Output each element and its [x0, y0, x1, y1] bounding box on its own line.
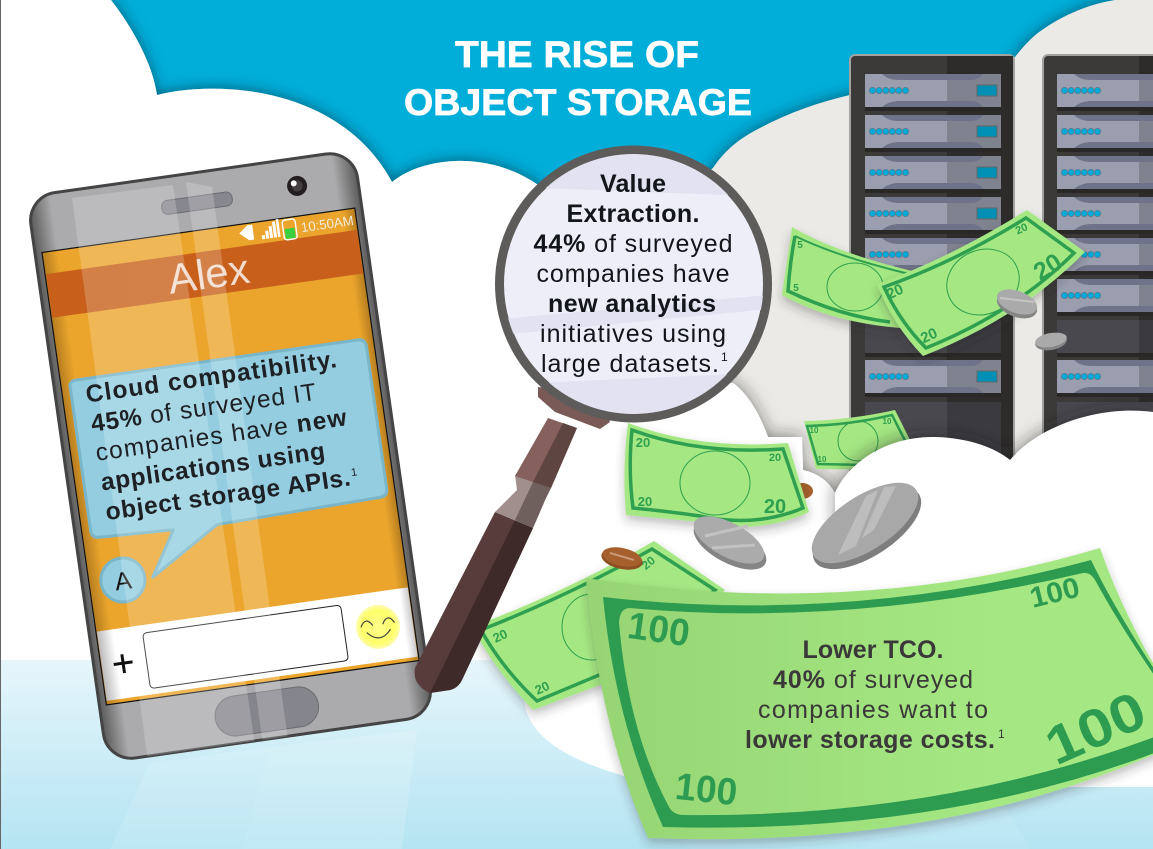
twenty dollar bill bottom left: 20 [490, 626, 510, 646]
cloud: grey behind servers [680, 0, 1153, 620]
twenty dollar bill bottom left: 20 [532, 678, 552, 698]
twenty dollar bill over rack: 20 [884, 281, 906, 303]
text: value extraction: 1 [721, 350, 728, 364]
text: value extraction: 44% of surveyed [534, 230, 732, 258]
cloud: upper left [0, 0, 700, 680]
bubble text: 1 [350, 466, 358, 479]
title: OBJECT STORAGE [404, 82, 752, 123]
ten dollar bill: 10 [818, 455, 827, 464]
screen [42, 208, 419, 705]
coin falling by rack [1034, 330, 1068, 353]
icon: speaker volume [238, 225, 254, 241]
avatar: A [113, 566, 134, 596]
bill border [603, 560, 1153, 828]
smartphone [27, 150, 434, 762]
text: lower TCO: 40% of surveyed [773, 666, 973, 694]
bubble text: Cloud compatibility. [84, 346, 338, 409]
bill paper [586, 548, 1153, 839]
text: lower TCO: 1 [998, 727, 1005, 741]
icon: signal [260, 219, 281, 239]
glare stripes [72, 182, 288, 762]
text: lower TCO [745, 636, 1005, 754]
chat bubble [69, 339, 394, 585]
twenty dollar bill middle: 20 [636, 435, 650, 450]
status clock: 10:50AM [300, 213, 355, 235]
ten dollar bill: 10 [810, 426, 819, 435]
bubble text [84, 346, 360, 526]
icon: smiley [353, 602, 403, 652]
coin on bill [993, 284, 1041, 323]
five dollar bill: 5 [797, 240, 803, 251]
hundred dollar bill: 100 [1027, 572, 1083, 615]
twenty dollar bill over rack: 20 [1014, 221, 1030, 237]
twenty dollar bill middle [624, 423, 809, 527]
bubble text: applications using [99, 438, 327, 496]
icon: battery [282, 219, 298, 240]
penny behind bill [791, 483, 813, 499]
home button [213, 684, 321, 739]
twenty dollar bill middle: 20 [769, 452, 781, 464]
twenty dollar bill over rack: 20 [1029, 248, 1067, 286]
text: lower TCO: Lower TCO. [802, 636, 944, 664]
text: lower TCO: lower storage costs. [745, 726, 995, 754]
text: value extraction: large datasets. [541, 350, 719, 378]
twenty dollar bill bottom left [472, 541, 725, 710]
input field [143, 605, 348, 689]
hundred dollar bill: 100 [1036, 680, 1153, 777]
penny on bill [599, 544, 645, 573]
contact name: Alex [165, 245, 252, 303]
white filler under bumps [800, 520, 1153, 620]
five dollar bill: 5 [793, 283, 799, 294]
text: value extraction: new analytics [548, 290, 716, 318]
text: value extraction: Value [600, 170, 666, 198]
camera [286, 175, 308, 197]
text: lower TCO: companies want to [758, 696, 988, 724]
bubble text: companies have new [94, 404, 349, 467]
text: value extraction: initiatives using [540, 320, 726, 348]
bubble text: object storage APIs. [104, 464, 352, 526]
floor [0, 660, 1153, 849]
ten dollar bill [804, 410, 925, 470]
grey coin small [686, 507, 774, 580]
ten dollar bill: 10 [883, 417, 892, 426]
plus icon [112, 653, 134, 674]
speaker [161, 191, 233, 215]
text: value extraction [534, 170, 732, 378]
cloud: lower centre [520, 383, 1153, 787]
input area [97, 587, 418, 701]
twenty dollar bill middle: 20 [638, 494, 652, 509]
cloud shadow on servers [730, 374, 842, 493]
five dollar bill [782, 227, 925, 328]
magnifying glass [415, 140, 780, 693]
twenty dollar bill over rack: 20 [918, 325, 940, 347]
twenty dollar bill over rack [877, 210, 1085, 356]
header band [46, 230, 363, 318]
lens [490, 140, 780, 430]
title: THE RISE OF [455, 34, 699, 75]
handle [415, 387, 610, 693]
title [404, 34, 752, 123]
server rack left [850, 55, 1014, 475]
hundred dollar bill: 100 [625, 605, 692, 655]
text: value extraction: Extraction. [566, 200, 700, 228]
twenty dollar bill bottom left: 20 [639, 553, 658, 573]
cloud: lower right bumps [835, 411, 1153, 560]
twenty dollar bill middle: 20 [764, 496, 786, 518]
grey coin large [799, 467, 934, 585]
bubble text: 45% of surveyed IT [89, 379, 318, 438]
phone body [27, 150, 434, 762]
server rack right [1043, 55, 1153, 475]
text: value extraction: companies have [536, 260, 730, 288]
hundred dollar bill: 100 [673, 766, 739, 814]
avatar [98, 555, 148, 605]
hundred dollar bill [586, 548, 1153, 839]
page edge line [0, 0, 1, 849]
